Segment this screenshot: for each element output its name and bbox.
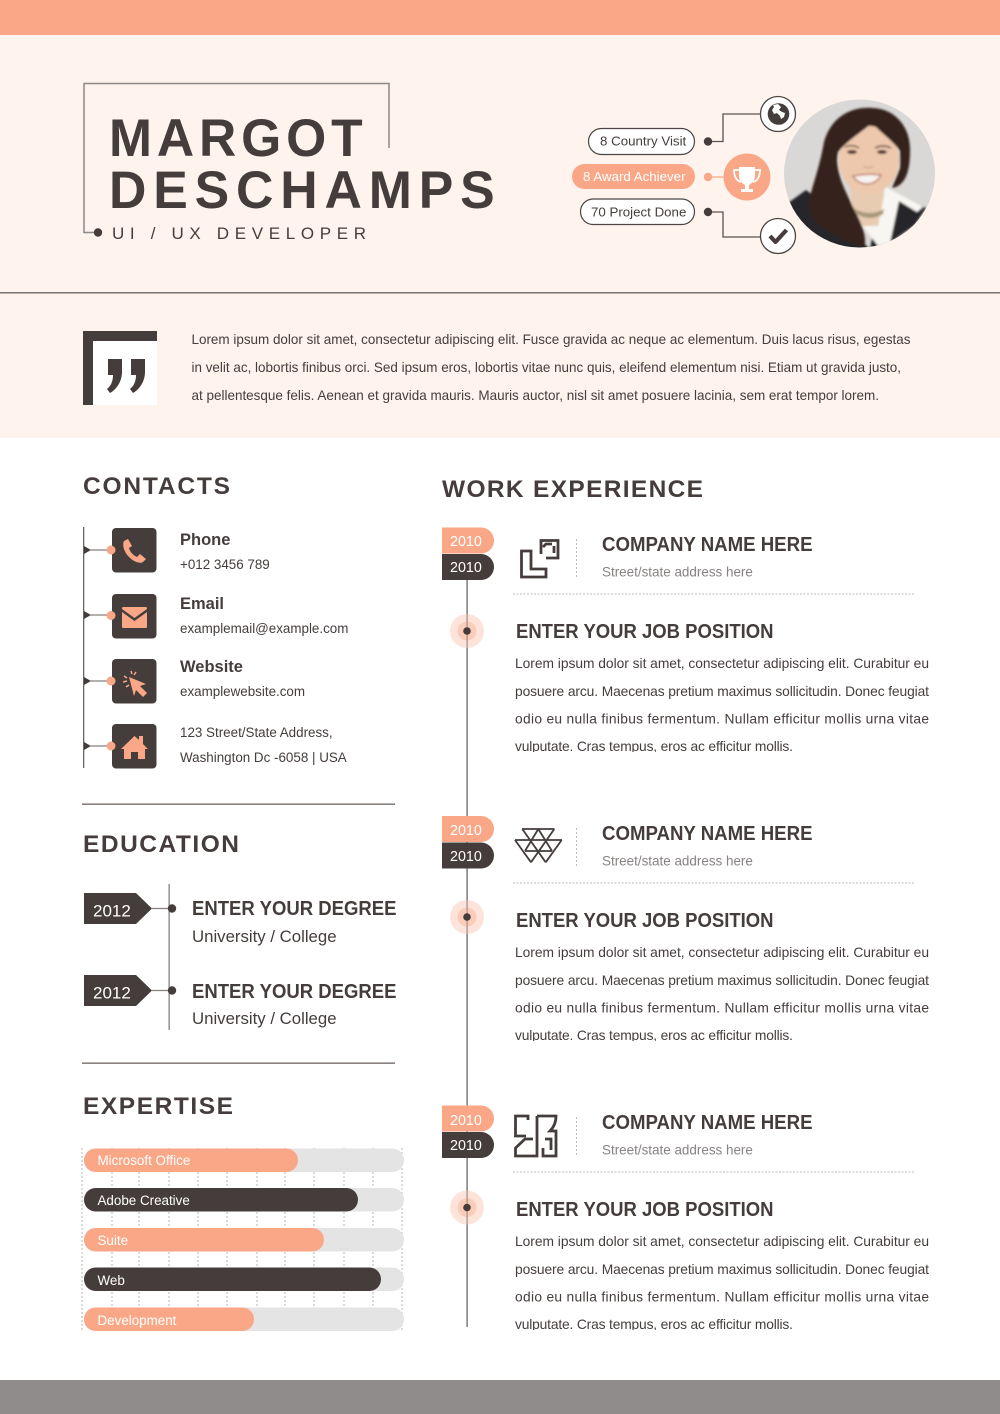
contact: address xyxy=(84,724,347,768)
contact: website: Website xyxy=(180,658,243,676)
contact: email xyxy=(84,594,348,638)
contact: phone: Phone xyxy=(180,531,230,549)
education entry 1: 2012 xyxy=(93,902,131,920)
heading: expertise: EXPERTISE xyxy=(83,1093,233,1120)
education entry 1: University / College xyxy=(192,927,337,946)
contact: phone xyxy=(84,528,270,572)
contact: website: examplewebsite.com xyxy=(180,684,305,699)
work entry 3: COMPANY NAME HERE xyxy=(602,1112,812,1134)
work entry 1: odio eu nulla finibus fermentum. Nullam efficitur mollis urna vitae xyxy=(515,712,929,726)
work entry 3: vulputate. Cras tempus, eros ac efficitur mollis. xyxy=(515,1317,793,1332)
bottom band xyxy=(0,1380,1000,1414)
education spine xyxy=(168,884,170,1030)
work entry 1: posuere arcu. Maecenas pretium maximus sollicitudin. Donec feugiat xyxy=(515,684,929,699)
icon: check xyxy=(760,218,796,254)
heading: education: EDUCATION xyxy=(83,831,239,858)
icon: company logo 1 xyxy=(522,540,558,577)
work entry 3: 2010 xyxy=(450,1113,482,1129)
work entry 1: 2010 xyxy=(450,560,482,576)
work entry 3: 2010 xyxy=(450,1138,482,1154)
title block: DESCHAMPS xyxy=(109,161,502,220)
contacts spine xyxy=(83,527,84,768)
work entry 1: COMPANY NAME HERE xyxy=(602,534,812,556)
intro paragraph: in velit ac, lobortis finibus orci. Sed ipsum eros, lobortis vitae nunc quis, eleifend elementum nisi. Etiam ut gravida justo, xyxy=(192,359,901,375)
work entry 2: COMPANY NAME HERE xyxy=(602,823,812,845)
education entry 2 xyxy=(84,975,396,1028)
work entry 2: posuere arcu. Maecenas pretium maximus sollicitudin. Donec feugiat xyxy=(515,973,929,988)
intro paragraph: Lorem ipsum dolor sit amet, consectetur adipiscing elit. Fusce gravida ac neque ac elementum. Duis lacus risus, egestas xyxy=(192,331,910,347)
header divider xyxy=(0,292,1000,294)
title block xyxy=(84,84,502,243)
work entry 3: ENTER YOUR JOB POSITION xyxy=(516,1199,774,1221)
education entry 1: ENTER YOUR DEGREE xyxy=(192,898,396,920)
work entry 2: Lorem ipsum dolor sit amet, consectetur adipiscing elit. Curabitur eu xyxy=(515,945,929,960)
left column divider xyxy=(82,804,395,805)
icon: trophy xyxy=(724,154,770,200)
title block: UI / UX DEVELOPER xyxy=(112,224,366,243)
portrait photo xyxy=(784,100,935,248)
work entry 2: 2010 xyxy=(450,823,482,839)
work entry 1: Street/state address here xyxy=(602,564,753,580)
work timeline spine xyxy=(466,578,468,1327)
contact: address: 123 Street/State Address, xyxy=(180,725,333,740)
contact: website xyxy=(84,658,305,704)
intro paragraph xyxy=(192,331,910,403)
contact: phone: +012 3456 789 xyxy=(180,557,270,572)
icon: company logo 2 xyxy=(515,829,562,862)
work entry 1 xyxy=(442,528,929,754)
stat: country visits xyxy=(588,128,712,154)
icon: company logo 3 xyxy=(516,1116,556,1156)
heading: contacts: CONTACTS xyxy=(83,473,230,500)
stat: projects done: 70 Project Done xyxy=(591,204,686,220)
contact: email: Email xyxy=(180,595,224,613)
work entry 2 xyxy=(442,816,929,1043)
expertise chart: Development xyxy=(98,1313,177,1328)
expertise chart: Microsoft Office xyxy=(98,1153,190,1168)
quote icon xyxy=(83,331,157,405)
work entry 3: Lorem ipsum dolor sit amet, consectetur adipiscing elit. Curabitur eu xyxy=(515,1234,929,1249)
work entry 1: 2010 xyxy=(450,534,482,550)
icon: globe xyxy=(760,96,796,132)
work entry 2: ENTER YOUR JOB POSITION xyxy=(516,910,774,932)
work entry 3: odio eu nulla finibus fermentum. Nullam efficitur mollis urna vitae xyxy=(515,1290,929,1304)
education entry 2: ENTER YOUR DEGREE xyxy=(192,981,396,1003)
work entry 1: Lorem ipsum dolor sit amet, consectetur adipiscing elit. Curabitur eu xyxy=(515,656,929,671)
work entry 2: 2010 xyxy=(450,849,482,865)
title block: MARGOT xyxy=(109,109,368,168)
left column divider xyxy=(82,1062,395,1064)
expertise chart: Web xyxy=(98,1273,125,1288)
work entry 3: Street/state address here xyxy=(602,1142,753,1158)
work entry 3 xyxy=(442,1106,929,1332)
expertise chart: Adobe Creative xyxy=(98,1193,190,1208)
work entry 2: vulputate. Cras tempus, eros ac efficitur mollis. xyxy=(515,1028,793,1043)
education entry 1 xyxy=(84,893,396,946)
intro paragraph: at pellentesque felis. Aenean et gravida mauris. Mauris auctor, nisl sit amet posuere lacinia, sem erat tempor lorem. xyxy=(192,387,879,403)
stats connectors xyxy=(708,114,761,237)
contact: email: examplemail@example.com xyxy=(180,621,348,636)
work entry 2: odio eu nulla finibus fermentum. Nullam efficitur mollis urna vitae xyxy=(515,1000,929,1016)
work entry 1: vulputate. Cras tempus, eros ac efficitur mollis. xyxy=(515,739,793,754)
stat: award achiever: 8 Award Achiever xyxy=(583,169,686,184)
top band xyxy=(0,0,1000,35)
stat: award achiever xyxy=(572,164,712,189)
expertise chart xyxy=(82,1148,404,1332)
education entry 2: 2012 xyxy=(93,984,131,1002)
contact: address: Washington Dc -6058 | USA xyxy=(180,750,347,765)
education entry 2: University / College xyxy=(192,1009,337,1028)
work entry 3: posuere arcu. Maecenas pretium maximus sollicitudin. Donec feugiat xyxy=(515,1262,929,1277)
work entry 2: Street/state address here xyxy=(602,854,753,868)
work entry 1: ENTER YOUR JOB POSITION xyxy=(516,621,774,643)
stat: projects done xyxy=(580,199,712,224)
header background xyxy=(0,35,1000,438)
expertise chart: Suite xyxy=(98,1233,128,1248)
heading: work experience: WORK EXPERIENCE xyxy=(442,476,703,503)
stat: country visits: 8 Country Visit xyxy=(600,134,687,148)
